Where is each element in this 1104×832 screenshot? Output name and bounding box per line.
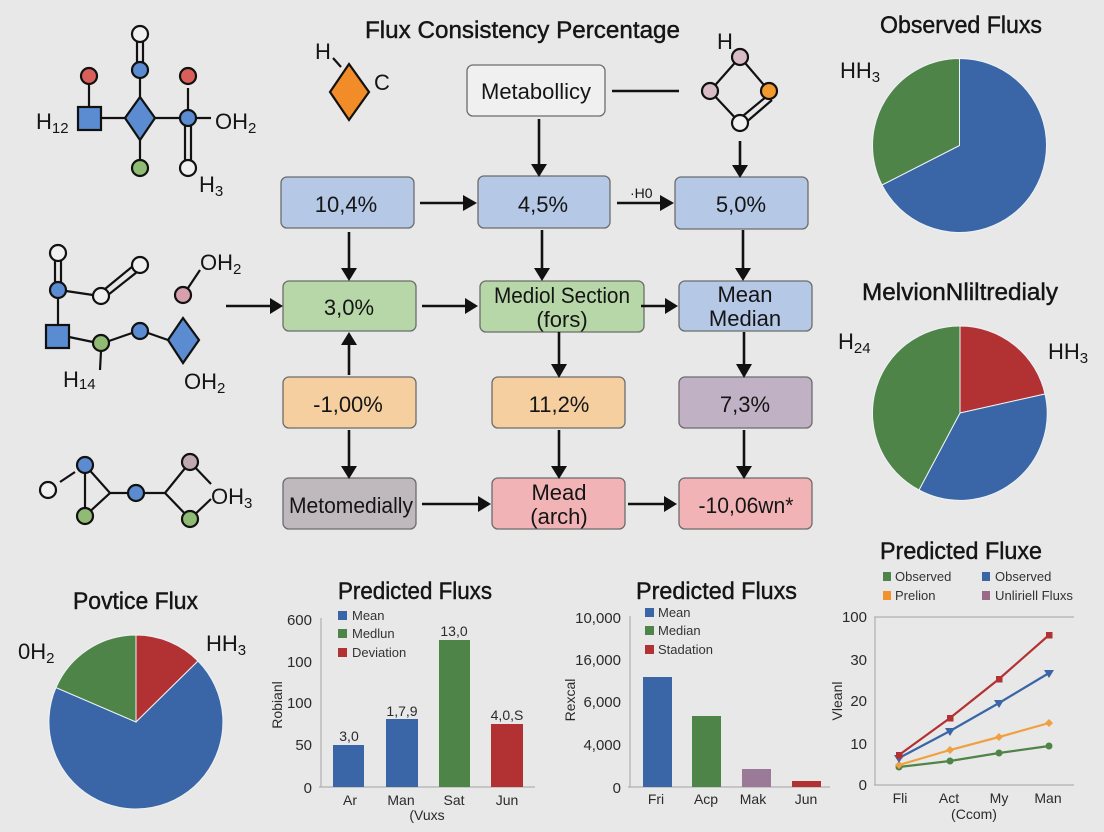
molecule: lower left	[40, 454, 252, 527]
box: 10,4%	[281, 177, 414, 228]
box: -10,06wn*: -10,06wn*	[698, 493, 794, 518]
bar chart: Predicted Fluxs (right): 6,000	[583, 694, 621, 711]
series: green	[896, 742, 1052, 770]
bar chart: Predicted Fluxs (left): (Vuxs	[409, 807, 445, 823]
legend: Mean	[658, 605, 691, 620]
box: Metomedially	[283, 478, 416, 529]
molecule: lower left: OH	[211, 484, 244, 509]
box: Mediol Section: Mediol Section	[494, 283, 630, 308]
box: Mean Median: Median	[709, 306, 781, 331]
line chart: Predicted Fluxe	[829, 538, 1074, 822]
bars	[333, 640, 523, 787]
legend: Deviation	[352, 645, 406, 660]
bar chart: Predicted Fluxs (right): 4,000	[583, 737, 621, 754]
pie chart: Povtice Flux	[18, 588, 246, 809]
title: Flux Consistency Percentage	[365, 17, 680, 44]
line chart: Predicted Fluxe: 20	[850, 693, 867, 710]
line chart: Predicted Fluxe: Vleanl	[829, 682, 845, 720]
box: 4,5%	[478, 176, 610, 228]
line chart: Predicted Fluxe: 30	[850, 652, 867, 669]
bar chart: Predicted Fluxs (left): Jun	[496, 792, 518, 808]
molecule: top left: 3	[215, 183, 223, 200]
bar chart: Predicted Fluxs (right): Rexcal	[562, 679, 578, 721]
series: orange	[895, 719, 1053, 769]
molecule: middle left: 14	[79, 376, 96, 393]
molecule: orange diamond: H	[315, 39, 331, 64]
bar chart: Predicted Fluxs (right)	[562, 578, 830, 807]
legend: Unliriell Fluxs	[995, 588, 1073, 603]
molecule: middle left: 2	[217, 380, 225, 397]
series: blue	[894, 670, 1054, 763]
molecule: middle left: H	[63, 367, 79, 392]
legend: Prelion	[895, 588, 935, 603]
box: 4,5%: 4,5%	[518, 192, 568, 217]
molecule: top left: 12	[52, 120, 69, 137]
legend: Stadation	[658, 642, 713, 657]
box: Metomedially: Metomedially	[289, 493, 413, 518]
pie chart: MelvionNliltredialy: H	[838, 329, 854, 354]
bar chart: Predicted Fluxs (right): 16,000	[575, 652, 621, 669]
box: 7,3%	[679, 377, 812, 428]
pie chart: Observed Fluxs: Observed Fluxs	[880, 12, 1042, 39]
molecule: top left: OH	[215, 109, 248, 134]
box: Mead (arch)	[492, 478, 625, 529]
legend: Mean	[352, 608, 385, 623]
box: 3,0%: 3,0%	[324, 295, 374, 320]
bar chart: Predicted Fluxs (right): Jun	[795, 791, 817, 807]
legend	[645, 605, 713, 657]
box: Mean Median	[679, 281, 812, 331]
line chart: Predicted Fluxe: Predicted Fluxe	[880, 538, 1042, 565]
bar chart: Predicted Fluxs (right): Predicted Fluxs	[636, 578, 797, 605]
pie chart: Povtice Flux: 3	[238, 642, 246, 659]
pie chart: Observed Fluxs: 3	[872, 69, 880, 86]
legend: Medlun	[352, 626, 395, 641]
pie chart: Povtice Flux: HH	[206, 631, 238, 656]
molecule: middle left: 2	[233, 261, 241, 278]
bar chart: Predicted Fluxs (left): Sat	[443, 792, 465, 808]
line chart: Predicted Fluxe: Fli	[893, 790, 907, 806]
bar chart: Predicted Fluxs (left): 50	[295, 737, 312, 754]
bar chart: Predicted Fluxs (left): 600	[287, 612, 312, 629]
pie chart: Povtice Flux: 2	[46, 650, 54, 667]
molecule: top right ring	[702, 29, 777, 131]
flow diagram	[226, 65, 812, 529]
pie chart: MelvionNliltredialy	[838, 279, 1088, 500]
box: Mead (arch): (arch)	[530, 504, 588, 529]
molecule: top left: H	[36, 109, 52, 134]
molecule: orange diamond	[315, 39, 390, 120]
box: -1,00%	[283, 377, 416, 428]
molecule: top left	[36, 26, 256, 200]
pie chart: MelvionNliltredialy: 3	[1080, 350, 1088, 367]
box: 5,0%: 5,0%	[716, 192, 766, 217]
box: -1,00%: -1,00%	[313, 392, 383, 417]
bar chart: Predicted Fluxs (left): 100	[287, 695, 312, 712]
bar chart: Predicted Fluxs (left): 1,7,9	[386, 703, 418, 719]
line chart: Predicted Fluxe: 0	[859, 777, 867, 794]
bar chart: Predicted Fluxs (right): Fri	[648, 791, 664, 807]
legend: Observed	[995, 569, 1051, 584]
box: Mediol Section: (fors)	[536, 307, 588, 332]
molecule: top left: H	[199, 172, 215, 197]
molecule: lower left: 3	[244, 495, 252, 512]
box: 11,2%	[492, 377, 625, 428]
bar chart: Predicted Fluxs (left): 100	[287, 654, 312, 671]
pie chart: MelvionNliltredialy: 24	[854, 340, 871, 357]
box: 11,2%: 11,2%	[529, 392, 589, 417]
box: Mean Median: Mean	[717, 282, 773, 307]
box: 5,0%	[675, 177, 808, 229]
line chart: Predicted Fluxe: Act	[939, 790, 959, 806]
molecule: middle left: OH	[200, 250, 233, 275]
box: 10,4%: 10,4%	[315, 192, 377, 217]
bar chart: Predicted Fluxs (left): 3,0	[339, 728, 359, 744]
label: H0: ·H0	[630, 185, 653, 201]
legend: Observed	[895, 569, 951, 584]
arrows	[226, 91, 752, 512]
box: Metabollicy	[467, 65, 605, 116]
bar chart: Predicted Fluxs (left): Man	[387, 792, 415, 808]
bar chart: Predicted Fluxs (left): 13,0	[440, 623, 468, 639]
pie chart: Povtice Flux: Povtice Flux	[73, 588, 198, 615]
bars	[643, 677, 821, 787]
bar chart: Predicted Fluxs (left): Ar	[343, 792, 357, 808]
series: red	[896, 632, 1052, 758]
pie chart: Observed Fluxs: HH	[840, 58, 872, 83]
bar chart: Predicted Fluxs (right): 0	[613, 780, 621, 797]
bar chart: Predicted Fluxs (left): Robianl	[269, 681, 285, 729]
bar chart: Predicted Fluxs (left)	[269, 578, 535, 823]
line chart: Predicted Fluxe: 100	[842, 609, 867, 626]
box: Metabollicy: Metabollicy	[481, 79, 591, 104]
box: 3,0%	[283, 281, 416, 331]
bar chart: Predicted Fluxs (right): Acp	[694, 791, 718, 807]
legend: Median	[658, 623, 701, 638]
pie chart: Povtice Flux: 0H	[18, 639, 46, 664]
line chart: Predicted Fluxe: 10	[850, 736, 867, 753]
line chart: Predicted Fluxe: Man	[1034, 790, 1062, 806]
pie chart: Observed Fluxs	[840, 12, 1047, 232]
line chart: Predicted Fluxe: (Ccom)	[951, 806, 997, 822]
line chart: Predicted Fluxe: My	[990, 790, 1008, 806]
bar chart: Predicted Fluxs (left): 0	[304, 780, 312, 797]
molecule: top left: 2	[248, 120, 256, 137]
box: Mead (arch): Mead	[531, 480, 587, 505]
box: Mediol Section	[480, 281, 644, 332]
bar chart: Predicted Fluxs (right): 10,000	[575, 610, 621, 627]
molecule: top right ring: H	[717, 29, 733, 54]
bar chart: Predicted Fluxs (left): Predicted Fluxs	[338, 578, 492, 605]
legend	[883, 569, 1073, 603]
pie chart: MelvionNliltredialy: HH	[1048, 339, 1080, 364]
box: 7,3%: 7,3%	[720, 392, 770, 417]
bar chart: Predicted Fluxs (right): Mak	[740, 791, 767, 807]
molecule: orange diamond: C	[374, 70, 390, 95]
molecule: middle left	[46, 245, 241, 397]
pie chart: MelvionNliltredialy: MelvionNliltredialy	[862, 279, 1058, 306]
bar chart: Predicted Fluxs (left): 4,0,S	[491, 707, 523, 723]
legend	[338, 608, 406, 660]
box: -10,06wn*	[679, 478, 812, 529]
molecule: middle left: OH	[184, 369, 217, 394]
